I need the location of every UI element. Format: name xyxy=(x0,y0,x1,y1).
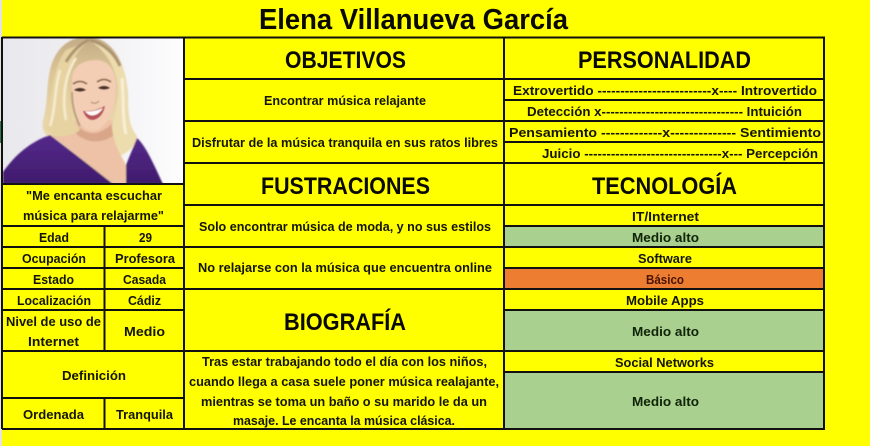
panel: tecnologia: IT/Internet xyxy=(632,209,700,224)
panel: tecnologia: Software xyxy=(638,251,692,266)
panel: demographics: Profesora xyxy=(115,251,176,266)
panel: tecnologia: TECNOLOGÍA xyxy=(592,172,737,200)
panel: biografia: cuando llega a casa suele poner música realajante, xyxy=(189,374,499,389)
panel: biografia: mientras se toma un baño o su marido le da un xyxy=(201,394,487,409)
panel: fustraciones: No relajarse con la música que encuentra online xyxy=(198,260,492,275)
panel: personalidad: Extrovertido -------------------------x---- Introvertido xyxy=(513,83,817,98)
level: Mobile Apps medio alto: Medio alto xyxy=(632,324,699,339)
level: Social Networks medio alto xyxy=(505,373,823,428)
panel: demographics: Estado xyxy=(33,272,74,287)
panel: definition: Definición xyxy=(62,368,126,383)
panel: demographics: Medio xyxy=(124,324,165,339)
panel: fustraciones: FUSTRACIONES xyxy=(261,173,430,200)
panel: biografia: masaje. Le encanta la música clásica. xyxy=(233,413,455,428)
level: Software básico xyxy=(505,269,823,289)
panel: biografia xyxy=(189,308,499,428)
level: Mobile Apps medio alto xyxy=(505,311,823,351)
panel: demographics: Edad xyxy=(39,230,69,245)
panel: objetivos: Encontrar música relajante xyxy=(264,93,426,108)
panel: quote xyxy=(23,188,164,223)
title: Elena Villanueva García xyxy=(259,4,569,36)
panel: personalidad xyxy=(509,47,821,161)
panel: fustraciones xyxy=(198,173,492,275)
photo: Elena portrait xyxy=(3,37,183,184)
panel: personalidad: Pensamiento -------------x-------------- Sentimiento xyxy=(509,125,821,140)
level: Software básico: Básico xyxy=(646,272,684,287)
panel: objetivos: OBJETIVOS xyxy=(285,47,406,74)
panel: tecnologia: Social Networks xyxy=(615,355,714,370)
panel: personalidad: Juicio -------------------------------x--- Percepción xyxy=(542,146,818,161)
panel: demographics: Casada xyxy=(123,272,167,287)
panel: definition: Ordenada xyxy=(23,407,85,422)
panel: demographics: Localización xyxy=(17,293,91,308)
panel: demographics: Internet xyxy=(28,334,80,349)
panel: demographics: Ocupación xyxy=(22,251,86,266)
panel: quote: música para relajarme" xyxy=(23,208,164,223)
panel: fustraciones: Solo encontrar música de moda, y no sus estilos xyxy=(199,219,491,234)
panel: demographics: Nivel de uso de xyxy=(6,314,101,329)
panel: tecnologia: Mobile Apps xyxy=(626,293,704,308)
level: IT/Internet medio alto: Medio alto xyxy=(632,230,699,245)
panel: demographics: Cádiz xyxy=(128,293,161,308)
panel: demographics xyxy=(6,230,176,349)
panel: objetivos xyxy=(192,47,498,150)
spreadsheet edge xyxy=(0,0,2,446)
panel: biografia: Tras estar trabajando todo el día con los niños, xyxy=(202,354,487,369)
panel: personalidad: PERSONALIDAD xyxy=(578,47,751,74)
level: Social Networks medio alto: Medio alto xyxy=(632,394,699,409)
panel: biografia: BIOGRAFÍA xyxy=(284,308,406,336)
panel: definition xyxy=(23,368,174,422)
panel: definition: Tranquila xyxy=(116,407,174,422)
panel: tecnologia xyxy=(505,172,823,428)
panel: demographics: 29 xyxy=(139,230,152,245)
panel: quote: "Me encanta escuchar xyxy=(26,188,162,203)
level: IT/Internet medio alto xyxy=(505,227,823,247)
panel: objetivos: Disfrutar de la música tranquila en sus ratos libres xyxy=(192,135,498,150)
panel: personalidad: Detección x-------------------------------- Intuición xyxy=(527,104,802,119)
